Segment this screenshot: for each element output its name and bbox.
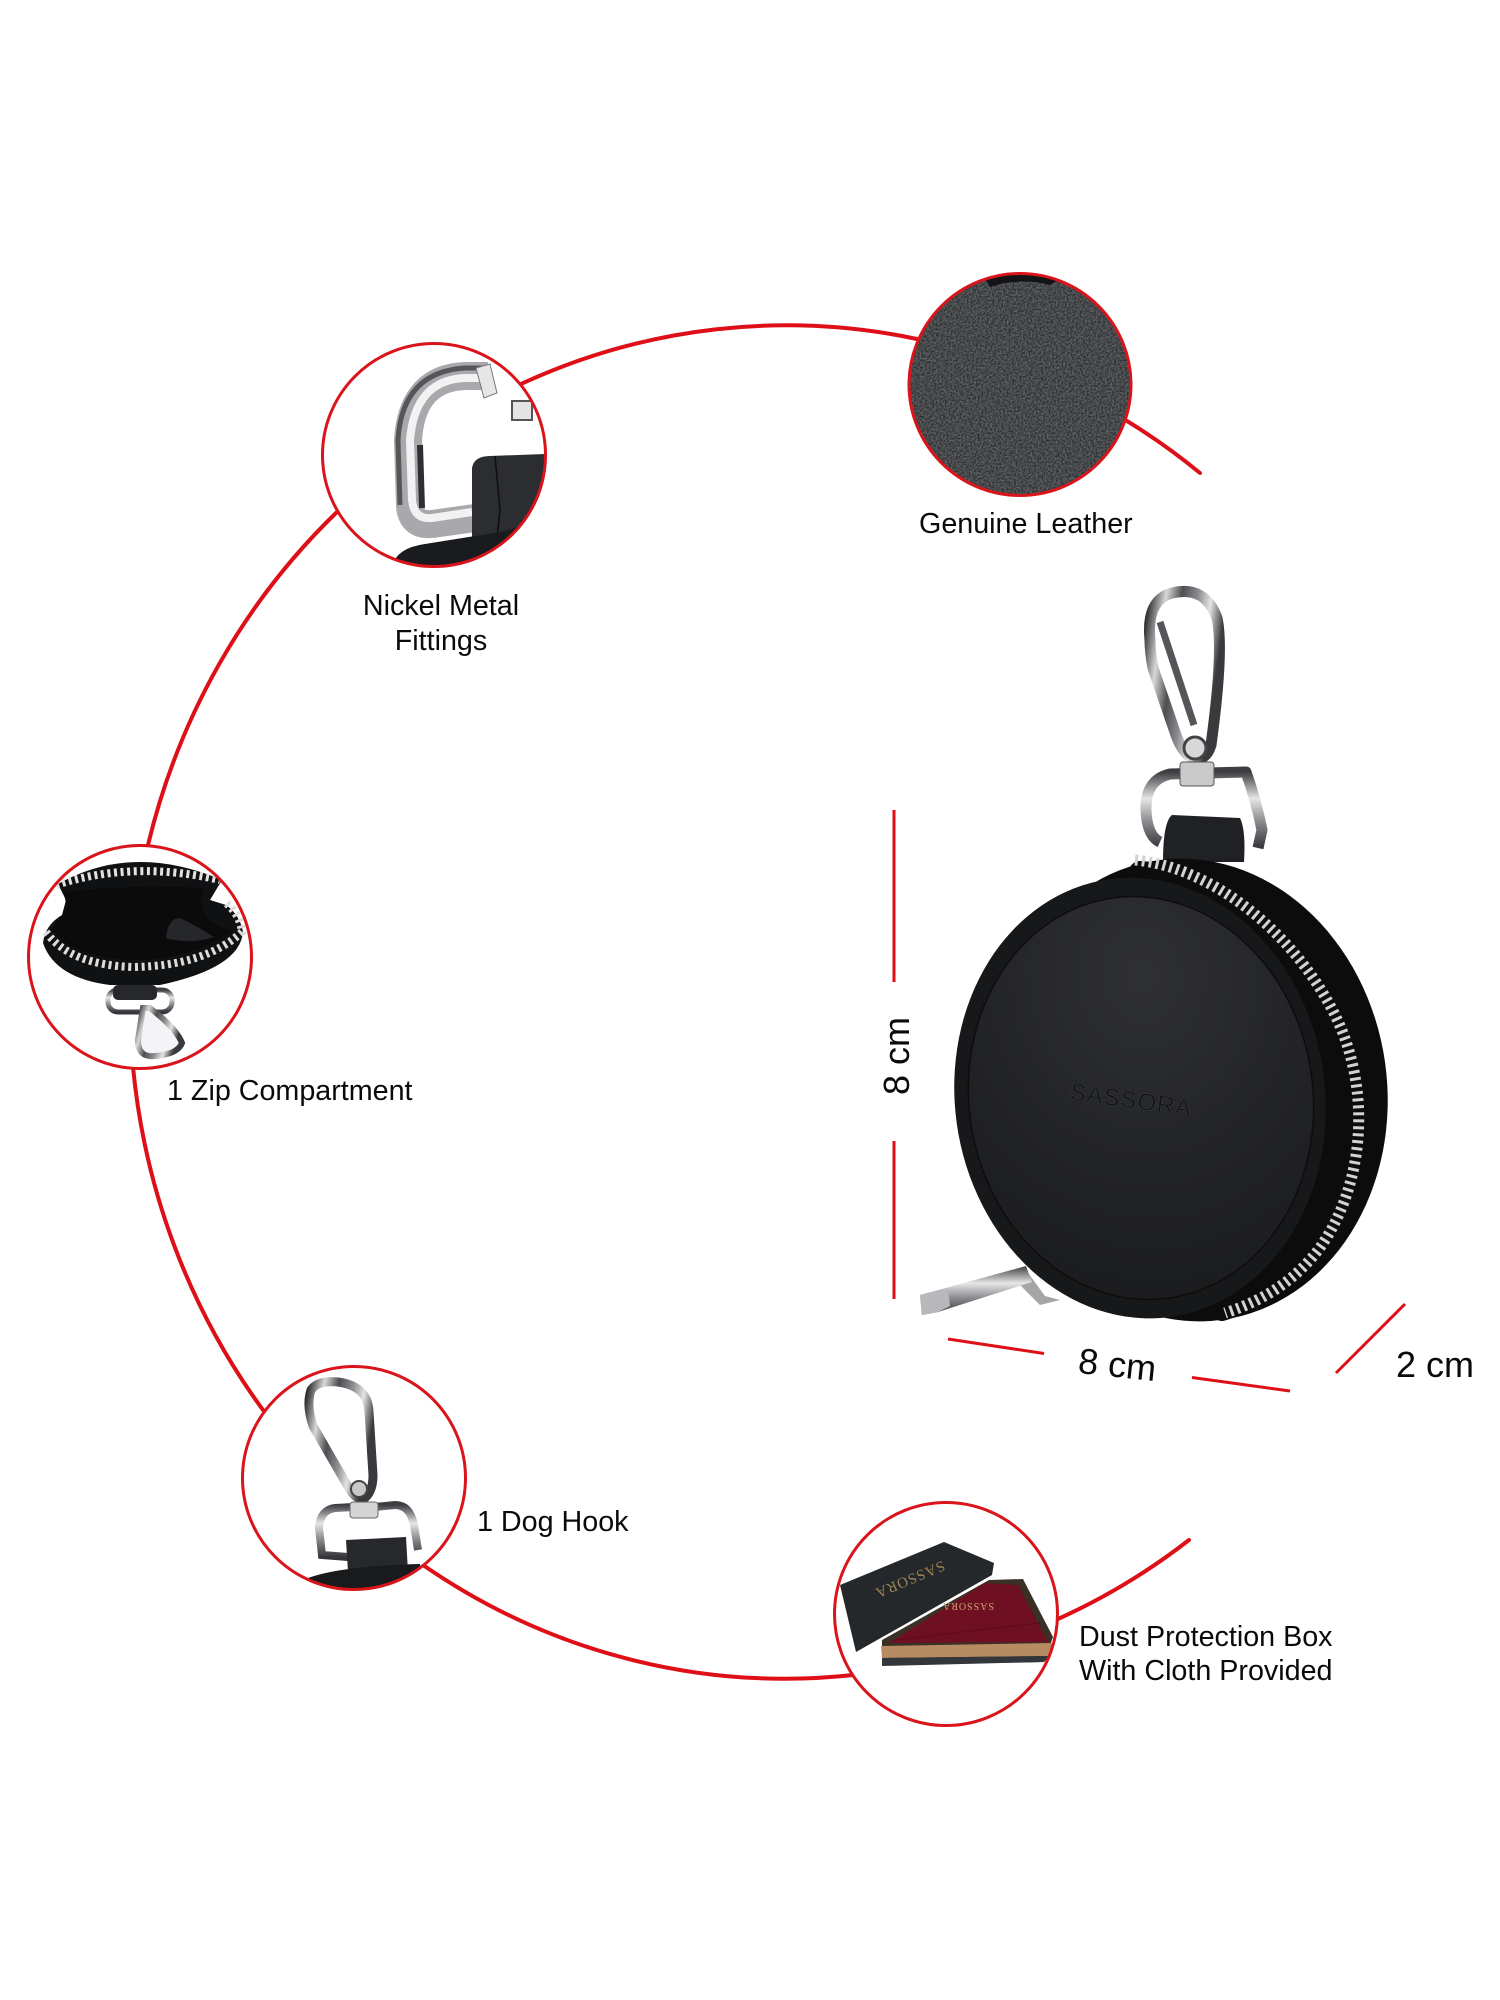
label: zip compartment: 1 Zip Compartment (167, 1075, 413, 1107)
label: nickel metal fittings: Fittings (395, 625, 487, 657)
feature: nickel metal fittings close-up (322, 344, 546, 570)
dimension: width 8 cm: 8 cm (1076, 1340, 1158, 1389)
hook carabiner (1149, 591, 1219, 759)
pouch back and zip band (963, 833, 1417, 1347)
label: dog hook: 1 Dog Hook (477, 1506, 629, 1538)
dimension: depth 2 cm (1336, 1304, 1474, 1385)
leather tab (1163, 815, 1244, 862)
dimension: width 8 cm (948, 1339, 1290, 1391)
feature: genuine leather swatch (909, 273, 1131, 496)
embossed brand: SASSORA (1068, 1079, 1194, 1123)
dimension: height 8 cm: 8 cm (876, 1017, 917, 1095)
feature: dog hook close-up (242, 1366, 466, 1600)
pouch front leather panel (926, 853, 1354, 1343)
product: round zip pouch with hook (920, 591, 1417, 1347)
feature: dust protection box close-up (834, 1502, 1058, 1726)
feature: dust protection box close-up: SASSORA (942, 1600, 994, 1611)
curved connector line (133, 325, 1200, 1679)
zip pull (920, 1266, 1060, 1315)
label: genuine leather: Genuine Leather (919, 508, 1133, 540)
label: nickel metal fittings: Nickel Metal (363, 590, 519, 622)
label: dust protection box: With Cloth Provided (1079, 1655, 1333, 1687)
label: dust protection box: Dust Protection Box (1079, 1621, 1333, 1653)
feature: zip compartment close-up (28, 846, 252, 1068)
swivel ring (1146, 762, 1262, 848)
dimension: depth 2 cm: 2 cm (1396, 1344, 1474, 1385)
feature: dust protection box close-up: SASSORA (872, 1557, 947, 1601)
